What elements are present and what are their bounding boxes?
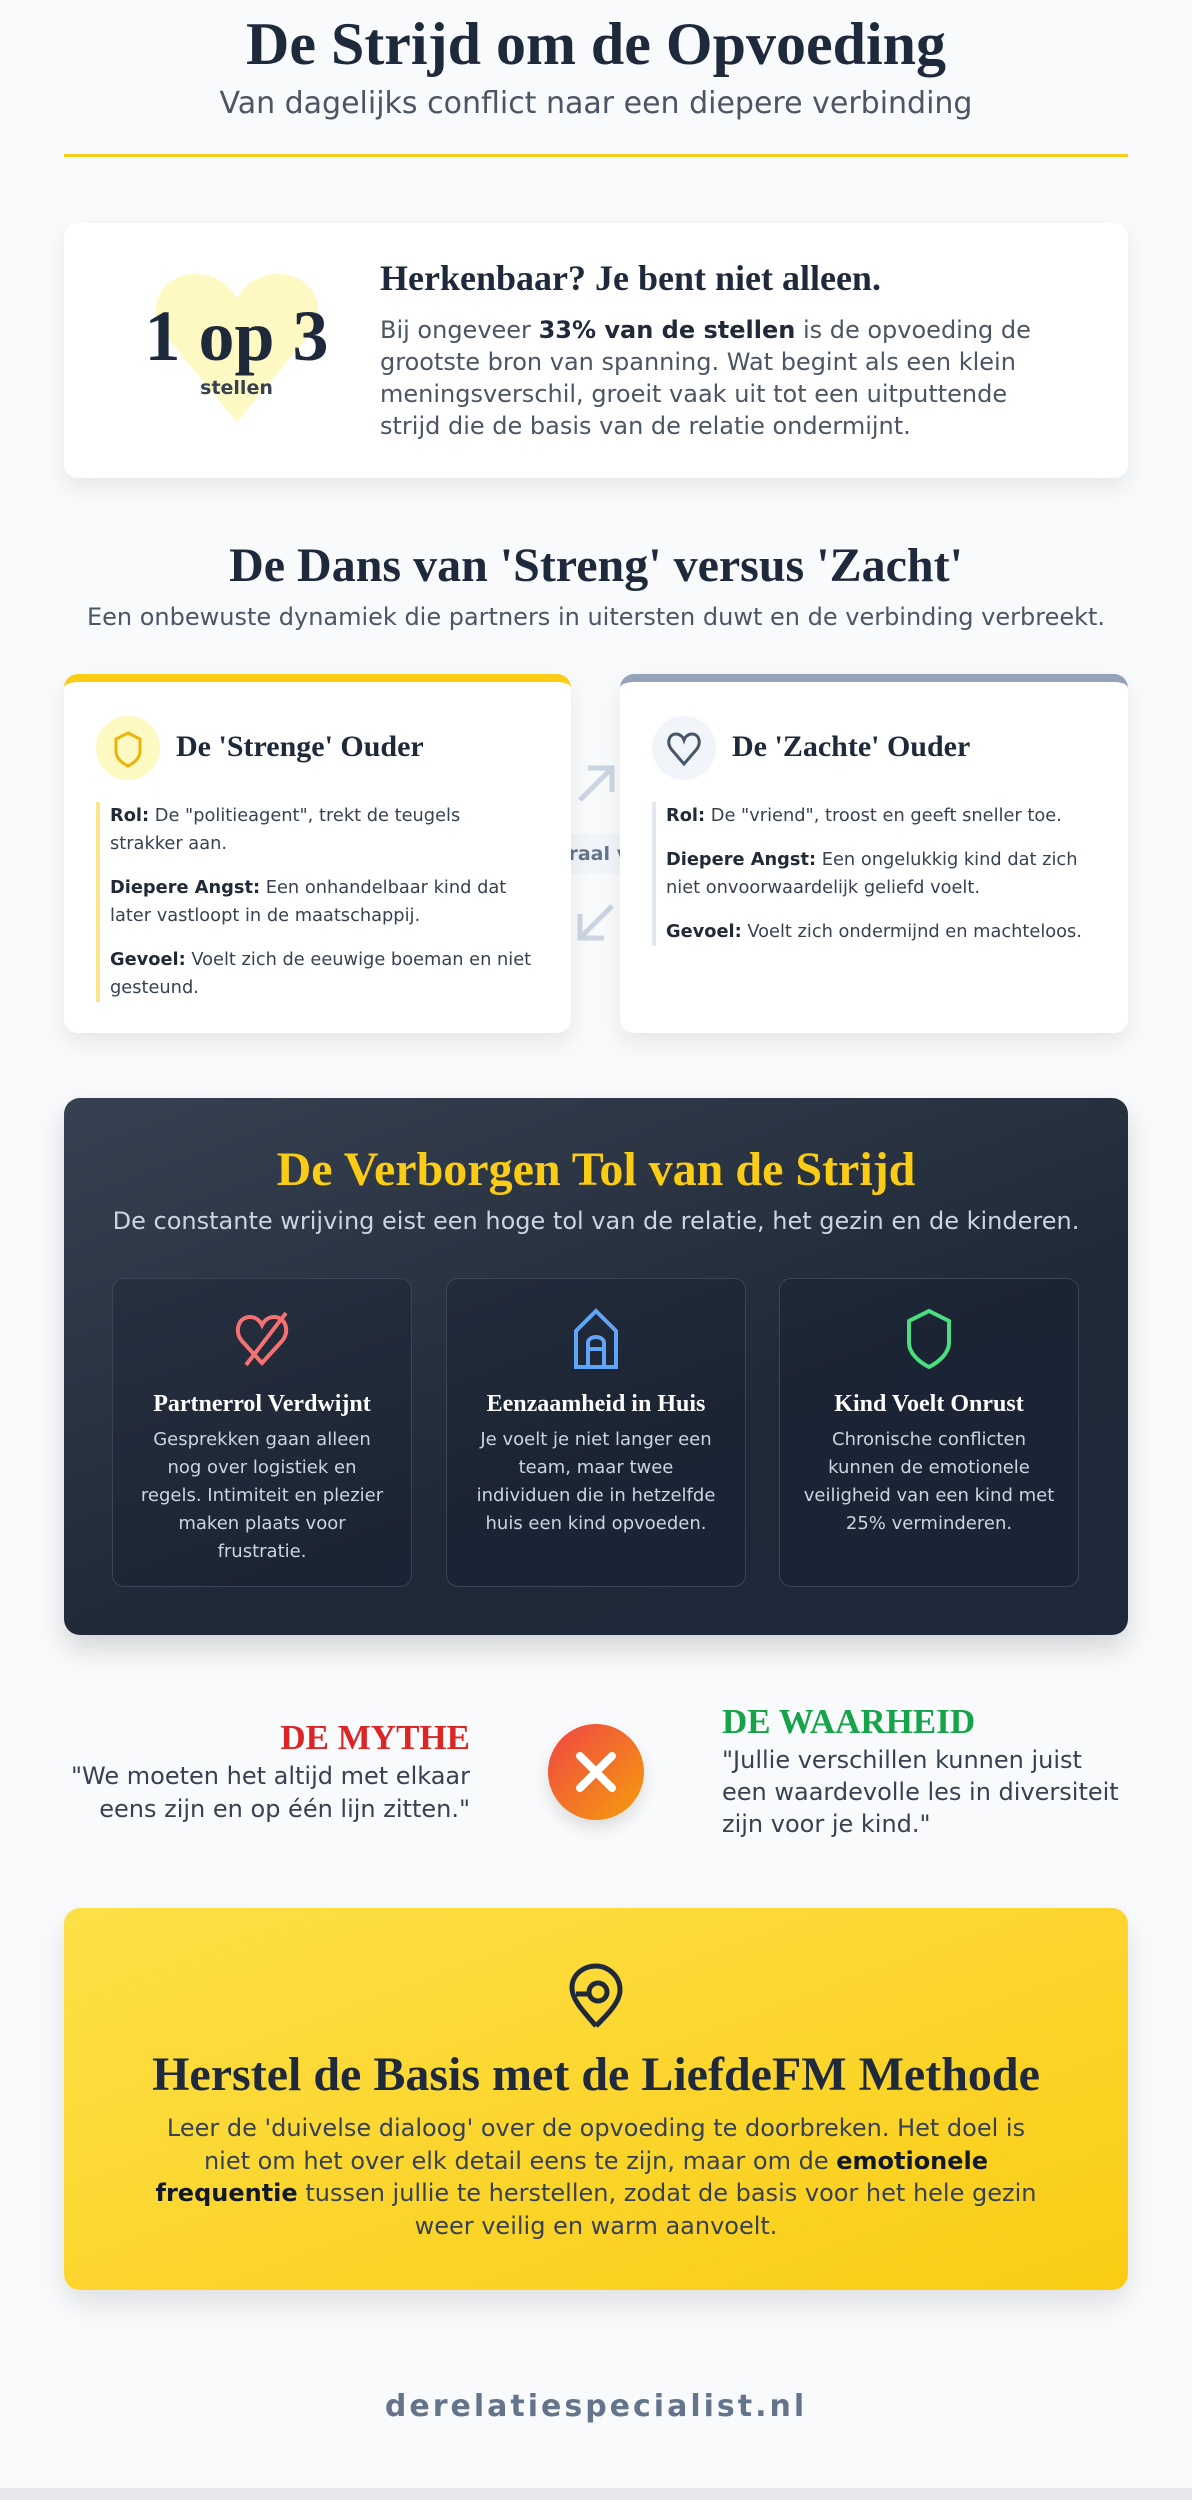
text block: niet om het over elk detail eens te zijn, maar om de emotionele: [204, 2146, 988, 2174]
icon: heart: [652, 716, 716, 780]
list: [652, 802, 1102, 946]
text block: frequentie tussen jullie te herstellen, zodat de basis voor het hele gezin: [156, 2179, 1036, 2207]
panel: strict parent: [64, 674, 571, 1033]
center pill: [520, 834, 670, 874]
card: partnerrol: regels. Intimiteit en plezier: [141, 1485, 383, 1506]
card: eenzaamheid: individuen die in hetzelfde: [477, 1485, 715, 1506]
card: kind: 25% verminderen.: [846, 1513, 1012, 1534]
card: kind: veiligheid van een kind met: [804, 1485, 1054, 1506]
card: eenzaamheid: team, maar twee: [519, 1457, 673, 1478]
card: kind: Kind Voelt Onrust: [834, 1391, 1024, 1417]
card: partnerrol: frustratie.: [218, 1541, 306, 1562]
truth: "Jullie verschillen kunnen juist: [722, 1746, 1082, 1774]
list: Rol: De "politieagent", trekt de teugels strakker aan.: [110, 805, 460, 854]
footer: derelatiespecialist.nl: [385, 2389, 807, 2424]
arrow: up-right: [578, 766, 614, 802]
heading: De Verborgen Tol van de Strijd: [277, 1143, 915, 1196]
arrow: down-left: [578, 904, 614, 940]
icon: shield: [907, 1308, 951, 1370]
panel: stat card: [64, 223, 1128, 478]
card: eenzaamheid: Eenzaamheid in Huis: [487, 1391, 705, 1417]
list: Diepere Angst: Een ongelukkig kind dat zich niet onvoorwaardelijk geliefd voelt.: [666, 849, 1077, 898]
icon: house: [574, 1308, 618, 1369]
subheading: Een onbewuste dynamiek die partners in uitersten duwt en de verbinding verbreekt.: [87, 603, 1105, 631]
center pill: Spiraal van: [535, 843, 655, 865]
icon: heart with stat: 1 op 3: [144, 296, 329, 376]
heading: dance: De Dans van 'Streng' versus 'Zacht': [229, 539, 963, 592]
heading: Herkenbaar? Je bent niet alleen.: [380, 258, 881, 298]
card: partnerrol: [112, 1278, 412, 1587]
title: De Strijd om de Opvoeding: [246, 11, 946, 77]
card: partnerrol: Gesprekken gaan alleen: [153, 1429, 371, 1450]
text block: grootste bron van spanning. Wat begint als een klein: [380, 348, 1016, 376]
icon: heart with stat: stellen: [200, 377, 273, 399]
subheading: De constante wrijving eist een hoge tol van de relatie, het gezin en de kinderen.: [113, 1207, 1079, 1235]
card: eenzaamheid: Je voelt je niet langer een: [480, 1429, 712, 1450]
card: partnerrol: nog over logistiek en: [167, 1457, 356, 1478]
myth: DE MYTHE: [280, 1718, 470, 1757]
myth: "We moeten het altijd met elkaar: [71, 1762, 470, 1790]
panel: soft parent: [620, 674, 1128, 1033]
heading: De 'Zachte' Ouder: [732, 730, 970, 763]
card: kind: Chronische conflicten: [832, 1429, 1026, 1450]
myth: [71, 1718, 470, 1823]
text block: Bij ongeveer 33% van de stellen is de opvoeding de: [380, 316, 1031, 344]
icon: broken heart: [236, 1312, 288, 1366]
truth: [722, 1702, 1119, 1838]
list: [96, 802, 536, 1002]
card: kind: kunnen de emotionele: [828, 1457, 1030, 1478]
myth: eens zijn en op één lijn zitten.": [99, 1795, 470, 1823]
icon: shield: [96, 716, 160, 780]
text block: [380, 316, 1031, 440]
list: Rol: De "vriend", troost en geeft sneller toe.: [666, 805, 1062, 826]
icon: location heart: [570, 1964, 622, 2028]
truth: een waardevolle les in diversiteit: [722, 1778, 1119, 1806]
list: Diepere Angst: Een onhandelbaar kind dat later vastloopt in de maatschappij.: [110, 877, 506, 926]
heading: Herstel de Basis met de LiefdeFM Methode: [152, 2048, 1040, 2101]
list: Gevoel: Voelt zich de eeuwige boeman en niet gesteund.: [110, 949, 531, 998]
truth: zijn voor je kind.": [722, 1810, 931, 1838]
card: partnerrol: Partnerrol Verdwijnt: [153, 1391, 371, 1417]
text block: strijd die de basis van de relatie ondermijnt.: [380, 412, 911, 440]
text block: weer veilig en warm aanvoelt.: [415, 2212, 777, 2240]
text block: meningsverschil, groeit vaak uit tot een uitputtende: [380, 380, 1007, 408]
heading: De 'Strenge' Ouder: [176, 730, 424, 763]
icon: heart with stat: [144, 274, 329, 422]
list: Gevoel: Voelt zich ondermijnd en machteloos.: [666, 921, 1082, 942]
card: eenzaamheid: huis een kind opvoeden.: [486, 1513, 706, 1534]
text block: [156, 2114, 1036, 2240]
subtitle: Van dagelijks conflict naar een diepere verbinding: [220, 86, 972, 121]
panel: CTA: [64, 1908, 1128, 2290]
panel: hidden toll: [64, 1098, 1128, 1635]
card: partnerrol: maken plaats voor: [178, 1513, 346, 1534]
card: eenzaamheid: [446, 1278, 746, 1587]
truth: DE WAARHEID: [722, 1702, 975, 1741]
icon: x circle: [548, 1724, 644, 1820]
text block: Leer de 'duivelse dialoog' over de opvoeding te doorbreken. Het doel is: [167, 2114, 1025, 2142]
card: kind: [779, 1278, 1079, 1587]
